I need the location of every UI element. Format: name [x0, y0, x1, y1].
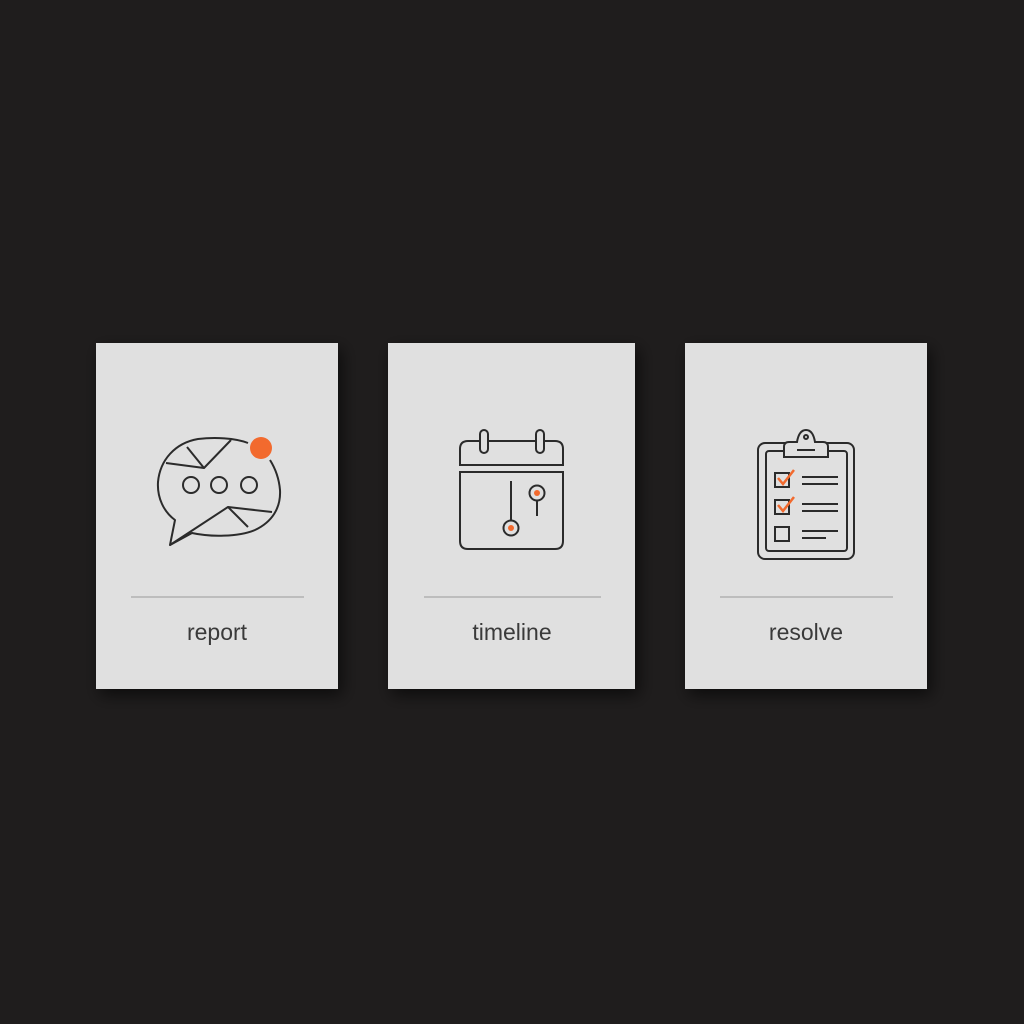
label: resolve: resolve [769, 619, 843, 645]
label: report: report [187, 619, 248, 645]
panel: resolve [685, 343, 927, 689]
panel: timeline [388, 343, 635, 689]
icon: clipboard [758, 430, 854, 559]
icon: calendar [460, 430, 563, 549]
panel: report [96, 343, 338, 689]
label: timeline: timeline [472, 619, 552, 645]
icon: speech bubble [158, 437, 280, 545]
